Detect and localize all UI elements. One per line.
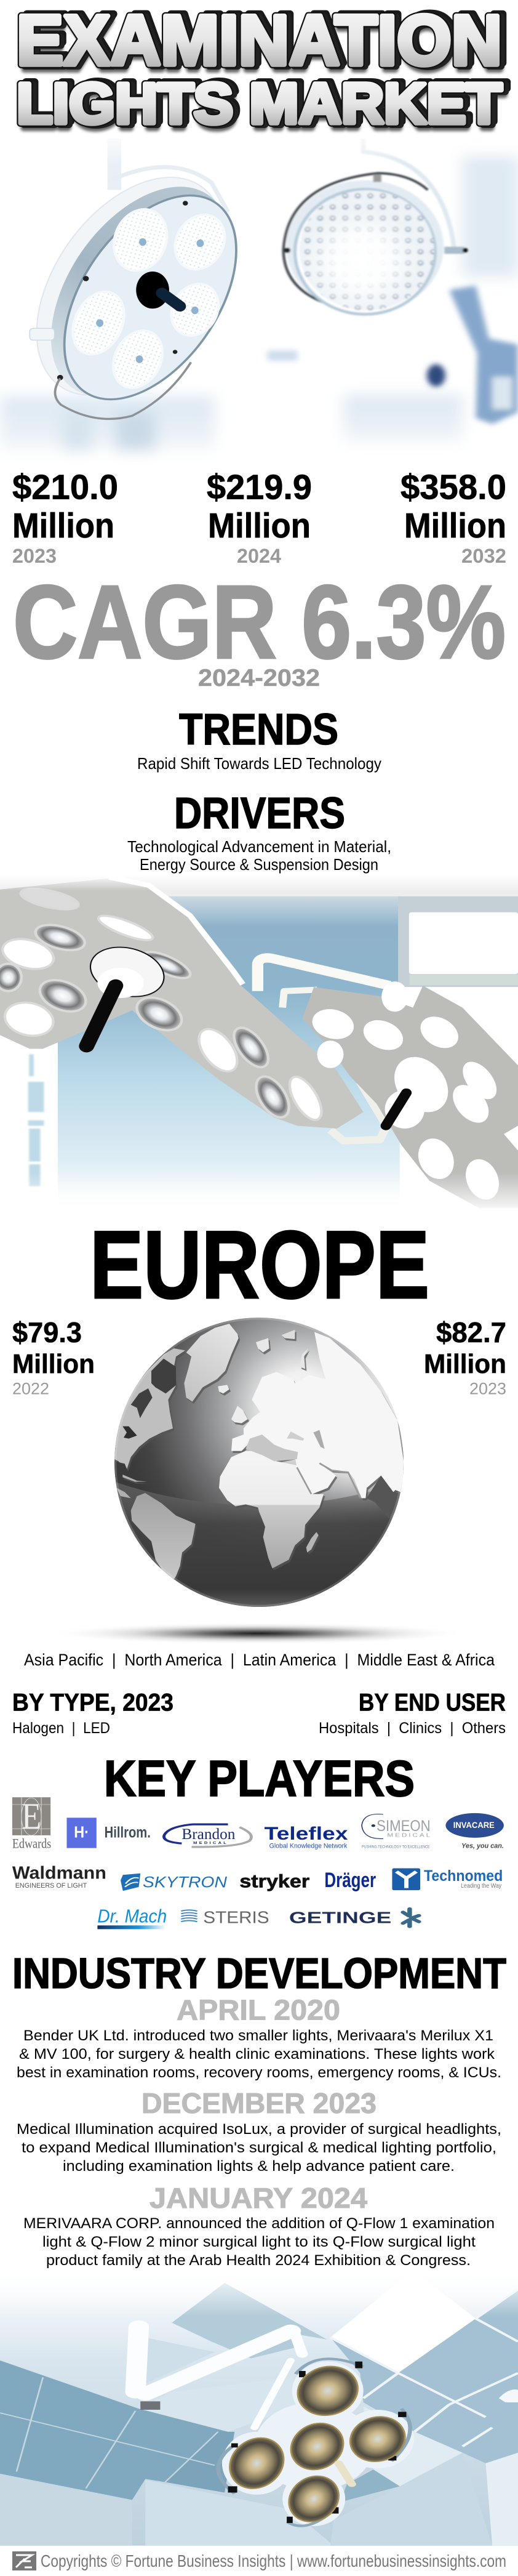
left light arm xyxy=(0,877,364,1129)
arm joint xyxy=(140,2401,160,2410)
CAGR period: 2024-2032 xyxy=(198,665,320,691)
development: April 2020 xyxy=(17,1994,501,2081)
north america xyxy=(114,1348,185,1470)
footer copyright xyxy=(12,2551,506,2570)
stat: 2024 market size xyxy=(207,468,312,567)
globe sphere xyxy=(114,1318,404,1607)
development: January 2024 xyxy=(23,2182,495,2269)
right side highlight xyxy=(320,1352,404,1503)
photo: examination lamps background xyxy=(0,129,518,455)
by type xyxy=(12,1689,173,1737)
title line 2: LIGHTS MARKET xyxy=(17,71,502,135)
title line 2: LIGHTS MARKET xyxy=(20,73,506,137)
logo: Dr. Mach: Dr. Mach xyxy=(97,1906,167,1927)
by type: Halogen | LED xyxy=(12,1720,110,1737)
logo: Hillrom: Hillrom. xyxy=(105,1824,151,1841)
stat: 2024 market size: 2024 xyxy=(237,545,281,567)
stat: 2023 market size: Million xyxy=(12,506,114,545)
lamp: blurred dome light on right xyxy=(284,139,468,314)
title line 1: EXAMINATION xyxy=(20,2,506,81)
logo: Simeon Medical xyxy=(362,1814,431,1849)
globe shadow xyxy=(49,1622,467,1644)
development: January 2024: MERIVAARA CORP. announced the addition of Q-Flow 1 examination xyxy=(23,2215,495,2232)
centre handle xyxy=(338,2463,352,2484)
blurred room background xyxy=(0,153,518,455)
logo: Brandon Medical: Brandon xyxy=(181,1825,235,1843)
development: January 2024: product family at the Arab Health 2024 Exhibition & Congress. xyxy=(46,2252,471,2269)
title line 1: EXAMINATION xyxy=(17,1,502,80)
stat: 2023 market size: 2023 xyxy=(12,545,57,567)
heading: key players: KEY PLAYERS xyxy=(104,1750,415,1807)
stat: 2024 market size: Million xyxy=(208,506,311,545)
caribbean xyxy=(114,1462,128,1478)
development: December 2023: Medical Illumination acquired IsoLux, a provider of surgical headlights, xyxy=(17,2121,501,2138)
logo: Simeon Medical: MEDICAL xyxy=(387,1833,431,1838)
red sea and gulf lines xyxy=(297,1463,361,1498)
logo: Waldmann xyxy=(12,1862,106,1889)
development: April 2020: best in examination rooms, recovery rooms, emergency rooms, & ICUs. xyxy=(17,2064,501,2081)
logo: Drager: Dräger xyxy=(324,1868,376,1892)
lamp handles xyxy=(218,2359,410,2526)
logo: Simeon Medical: PUSHING TECHNOLOGY TO EXCELLENCE xyxy=(362,1845,430,1849)
logo: Teleflex xyxy=(265,1823,348,1849)
stat: 2032 market size xyxy=(400,468,506,567)
central america and cuba xyxy=(116,1475,147,1498)
stat: Europe 2023 xyxy=(424,1316,506,1398)
logo: Invacare xyxy=(445,1813,504,1849)
development: April 2020: Bender UK Ltd. introduced two smaller lights, Merivaara's Merilux X1 xyxy=(23,2027,493,2044)
britain xyxy=(231,1406,248,1423)
title: Examination Lights Market xyxy=(17,0,508,140)
by end user: Hospitals | Clinics | Others xyxy=(319,1720,506,1737)
lens modules xyxy=(63,204,233,394)
svalbard xyxy=(256,1338,269,1353)
logo: Edwards: E xyxy=(22,1795,41,1837)
right light arm xyxy=(302,981,518,1208)
madagascar xyxy=(306,1532,319,1553)
title line 2: LIGHTS MARKET xyxy=(20,76,505,140)
by end user xyxy=(319,1689,506,1737)
novaya zemlya xyxy=(300,1348,308,1369)
stat: Europe 2023: $82.7 xyxy=(436,1316,506,1348)
lamp: sharp five-lens light on left xyxy=(0,139,272,425)
photo fades xyxy=(0,874,518,891)
development: January 2024: light & Q-Flow 2 minor surgical light to its Q-Flow surgical light xyxy=(42,2234,476,2250)
development: December 2023: including examination lights & help advance patient care. xyxy=(63,2158,455,2175)
globe rim xyxy=(116,1319,402,1606)
photo: operating room surgical lights xyxy=(0,874,518,1214)
stat: Europe 2023: Million xyxy=(424,1349,506,1379)
trends text: Rapid Shift Towards LED Technology xyxy=(137,754,381,773)
logo: Technomed xyxy=(392,1867,503,1890)
title line 1: EXAMINATION xyxy=(17,1,502,80)
room background xyxy=(0,875,518,1208)
stat: Europe 2022: $79.3 xyxy=(12,1316,82,1348)
heading: drivers: DRIVERS xyxy=(174,789,345,838)
regions list: Asia Pacific | North America | Latin America | Middle East & Africa xyxy=(24,1651,495,1669)
stat: Europe 2023: 2023 xyxy=(469,1379,506,1398)
logo: Teleflex: Global Knowledge Network xyxy=(269,1842,348,1849)
logo: Waldmann: Waldmann xyxy=(12,1862,106,1883)
logo: Teleflex: Teleflex xyxy=(265,1823,348,1843)
hudson bay and canadian waters xyxy=(131,1359,176,1418)
drivers text: Energy Source & Suspension Design xyxy=(140,855,378,874)
land masses xyxy=(114,1324,404,1579)
fade top of photo xyxy=(0,129,518,165)
logo: Getinge: GETINGE xyxy=(289,1909,391,1926)
stat: Europe 2022: Million xyxy=(12,1349,95,1379)
logo: Skytron xyxy=(121,1874,228,1891)
development: December 2023: DECEMBER 2023 xyxy=(141,2087,377,2119)
development: December 2023 xyxy=(17,2087,501,2175)
logo: Steris xyxy=(181,1908,269,1927)
indian ocean bay xyxy=(367,1475,400,1516)
eurasia xyxy=(231,1332,404,1498)
logo: Stryker: stryker xyxy=(239,1871,309,1891)
caspian sea xyxy=(313,1430,325,1449)
mediterranean sea xyxy=(245,1435,298,1461)
logo: Edwards: Edwards xyxy=(12,1836,51,1851)
stat: Europe 2022 xyxy=(12,1316,95,1398)
drivers text xyxy=(127,837,391,874)
photo top fade xyxy=(0,2268,518,2316)
logo wall xyxy=(12,1795,504,1929)
logo: Brandon Medical xyxy=(164,1824,252,1847)
stat: 2032 market size: $358.0 xyxy=(400,468,506,507)
logo: Brandon Medical: MEDICAL xyxy=(193,1841,226,1845)
title line 2: LIGHTS MARKET xyxy=(17,71,502,135)
development: January 2024: JANUARY 2024 xyxy=(149,2182,367,2214)
logo: Simeon Medical: SIMEON xyxy=(377,1817,431,1834)
ceiling arm xyxy=(135,2327,302,2428)
title line 1: EXAMINATION xyxy=(22,0,508,78)
icon: Fortune Business Insights logo xyxy=(12,2551,36,2570)
reflector lenses xyxy=(224,2363,410,2524)
heading: Europe: EUROPE xyxy=(90,1212,429,1319)
logo: Dr. Mach xyxy=(97,1906,167,1929)
photo: ceiling mounted examination light xyxy=(0,2268,518,2546)
logo: Edwards xyxy=(12,1795,51,1851)
logo: Hillrom xyxy=(66,1817,151,1848)
globe illustration xyxy=(114,1318,404,1607)
lamp head body xyxy=(222,2362,414,2526)
great lakes xyxy=(122,1427,137,1439)
heading: trends: TRENDS xyxy=(179,706,338,754)
logo: Steris: STERIS xyxy=(203,1908,269,1927)
stat: 2023 market size: $210.0 xyxy=(12,468,118,507)
greenland xyxy=(184,1324,239,1402)
title line 2: LIGHTS MARKET xyxy=(22,70,508,134)
stat: 2023 market size xyxy=(12,468,118,567)
logo: Skytron: SKYTRON xyxy=(143,1874,228,1891)
stat: 2032 market size: 2032 xyxy=(461,545,506,567)
franz josef land xyxy=(282,1330,295,1339)
drivers text: Technological Advancement in Material, xyxy=(127,837,391,856)
room walls and ceiling xyxy=(0,2270,518,2546)
iceland xyxy=(218,1385,229,1393)
title line 1: EXAMINATION xyxy=(20,6,505,85)
lower globe shading xyxy=(114,1482,404,1607)
africa xyxy=(219,1451,324,1568)
logo: Invacare: INVACARE xyxy=(453,1821,495,1830)
stat: 2024 market size: $219.9 xyxy=(207,468,312,507)
white handle frames xyxy=(258,958,390,1141)
development: December 2023: to expand Medical Illumination's surgical & medical lighting portfolio, xyxy=(22,2139,496,2156)
development: April 2020: APRIL 2020 xyxy=(177,1994,340,2026)
black sea xyxy=(287,1431,304,1441)
stat: 2032 market size: Million xyxy=(404,506,506,545)
logo: Hillrom: H· xyxy=(74,1823,89,1841)
logo: Waldmann: ENGINEERS OF LIGHT xyxy=(15,1882,87,1889)
by type: BY TYPE, 2023 xyxy=(12,1689,173,1717)
development: April 2020: & MV 100, for surgery & health clinic examinations. These lights work xyxy=(19,2046,495,2063)
stat: Europe 2022: 2022 xyxy=(12,1379,49,1398)
south america xyxy=(131,1493,196,1579)
lamp handle tabs xyxy=(228,2362,407,2523)
